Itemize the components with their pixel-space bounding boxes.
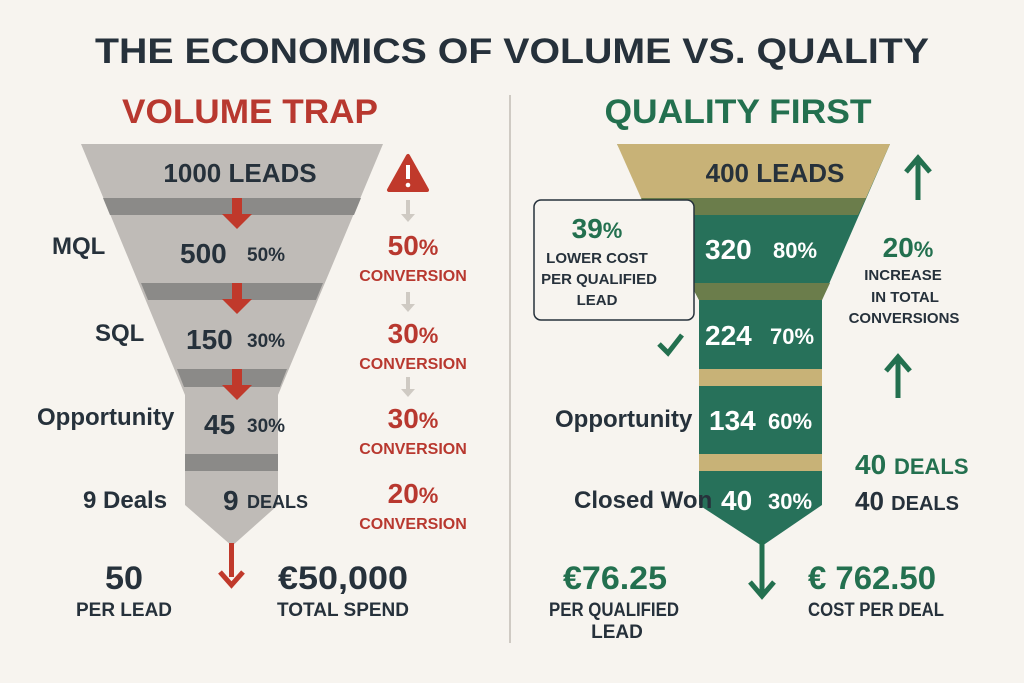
labels: volume stages: Opportunity xyxy=(37,404,175,431)
labels: volume stages: 9 Deals xyxy=(83,487,167,514)
panel: volume funnel: 150 xyxy=(186,324,233,355)
callout: 39% lower cost: PER QUALIFIED xyxy=(541,271,657,288)
labels: volume stages: MQL xyxy=(52,233,105,260)
text: conversion rates: CONVERSION xyxy=(359,441,467,458)
icon: up arrow top xyxy=(906,158,930,200)
text: 40 deals xyxy=(855,449,968,516)
text: 20% increase: IN TOTAL xyxy=(871,289,939,306)
callout: 39% lower cost: LOWER COST xyxy=(546,250,648,267)
heading: quality first: QUALITY FIRST xyxy=(604,93,872,131)
stats: quality: COST PER DEAL xyxy=(808,600,944,621)
stats: volume: €50,000 xyxy=(278,560,408,596)
text: quality stages: 400 LEADS xyxy=(706,158,844,188)
text: conversion rates xyxy=(359,230,467,533)
icon: check xyxy=(659,335,682,353)
labels: quality stages: Opportunity xyxy=(555,406,693,433)
labels: volume stages: SQL xyxy=(95,320,144,347)
panel: volume funnel xyxy=(81,144,383,546)
callout: 39% lower cost: 39% xyxy=(572,213,622,244)
text: 20% increase: INCREASE xyxy=(864,267,942,284)
text: conversion rates: CONVERSION xyxy=(359,268,467,285)
stats: quality: €76.25 xyxy=(563,560,667,596)
text: conversion rates: 50% xyxy=(388,230,438,261)
panel: volume funnel: 9 xyxy=(223,485,239,516)
stats: quality: LEAD xyxy=(591,622,643,643)
text: funnel stages: 1000 LEADS xyxy=(163,158,317,188)
stats: quality: PER QUALIFIED xyxy=(549,600,679,621)
panel: volume funnel: 30% xyxy=(247,331,285,352)
icon: up arrow middle xyxy=(886,357,910,398)
labels: quality stages: Closed Won xyxy=(574,487,712,514)
panel: quality funnel: 70% xyxy=(770,324,814,349)
panel: quality funnel: 134 xyxy=(709,405,756,436)
panel: volume funnel: 50% xyxy=(247,245,285,266)
panel: quality funnel: 80% xyxy=(773,238,817,263)
text: 20% increase: 20% xyxy=(883,232,933,263)
panel: quality funnel: 60% xyxy=(768,409,812,434)
stats: volume xyxy=(76,560,409,621)
title: THE ECONOMICS OF VOLUME VS. QUALITY xyxy=(95,32,929,71)
arrows: red funnel arrows xyxy=(222,198,252,400)
stats: volume: PER LEAD xyxy=(76,600,172,621)
arrow: green bottom xyxy=(750,540,774,596)
panel: quality funnel: 224 xyxy=(705,320,752,351)
panel: quality funnel: 30% xyxy=(768,489,812,514)
text: 40 deals: 40 DEALS xyxy=(855,486,959,516)
labels: quality stages xyxy=(555,406,712,514)
panel: quality funnel: 320 xyxy=(705,234,752,265)
heading: volume trap: VOLUME TRAP xyxy=(122,93,378,131)
text: conversion rates: 30% xyxy=(388,318,438,349)
text: 40 deals: 40 DEALS xyxy=(855,449,968,480)
text: conversion rates: 30% xyxy=(388,403,438,434)
arrows: gray connectors xyxy=(401,200,415,397)
panel: quality funnel xyxy=(617,144,890,546)
panel: volume funnel: DEALS xyxy=(247,492,308,512)
text: conversion rates: CONVERSION xyxy=(359,356,467,373)
stats: volume: TOTAL SPEND xyxy=(277,600,409,621)
labels: volume stages xyxy=(37,233,175,514)
callout: 39% lower cost: LEAD xyxy=(577,292,618,309)
stats: quality: € 762.50 xyxy=(808,560,936,596)
text: conversion rates: CONVERSION xyxy=(359,516,467,533)
callout: 39% lower cost xyxy=(534,200,694,320)
panel: quality funnel: 40 xyxy=(721,485,752,516)
text: conversion rates: 20% xyxy=(388,478,438,509)
stats: volume: 50 xyxy=(105,560,143,596)
arrow: red bottom xyxy=(220,543,243,585)
panel: volume funnel: 45 xyxy=(204,409,235,440)
panel: volume funnel: 30% xyxy=(247,416,285,437)
stats: quality xyxy=(549,560,944,643)
text: 20% increase xyxy=(849,232,959,327)
text: 20% increase: CONVERSIONS xyxy=(849,310,959,327)
icon: warning xyxy=(389,156,427,190)
panel: volume funnel: 500 xyxy=(180,238,227,269)
